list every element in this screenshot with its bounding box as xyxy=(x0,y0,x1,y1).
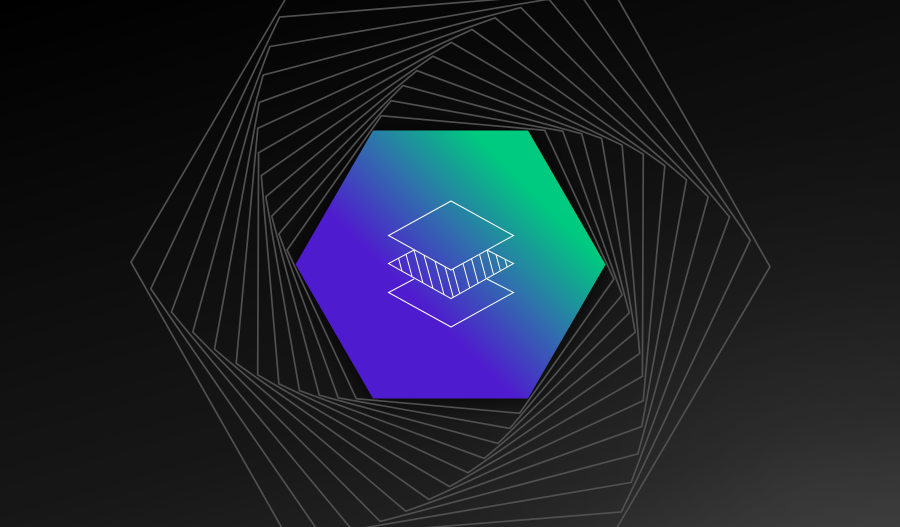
middle hatched layer xyxy=(388,250,514,298)
central gradient hexagon xyxy=(296,130,606,398)
hexagon shadow xyxy=(287,123,614,406)
spiral of rotating hexagon outlines xyxy=(129,0,772,527)
bottom layer outline xyxy=(388,279,514,327)
icon: stacked layers xyxy=(388,201,514,327)
top layer outline xyxy=(388,201,514,270)
